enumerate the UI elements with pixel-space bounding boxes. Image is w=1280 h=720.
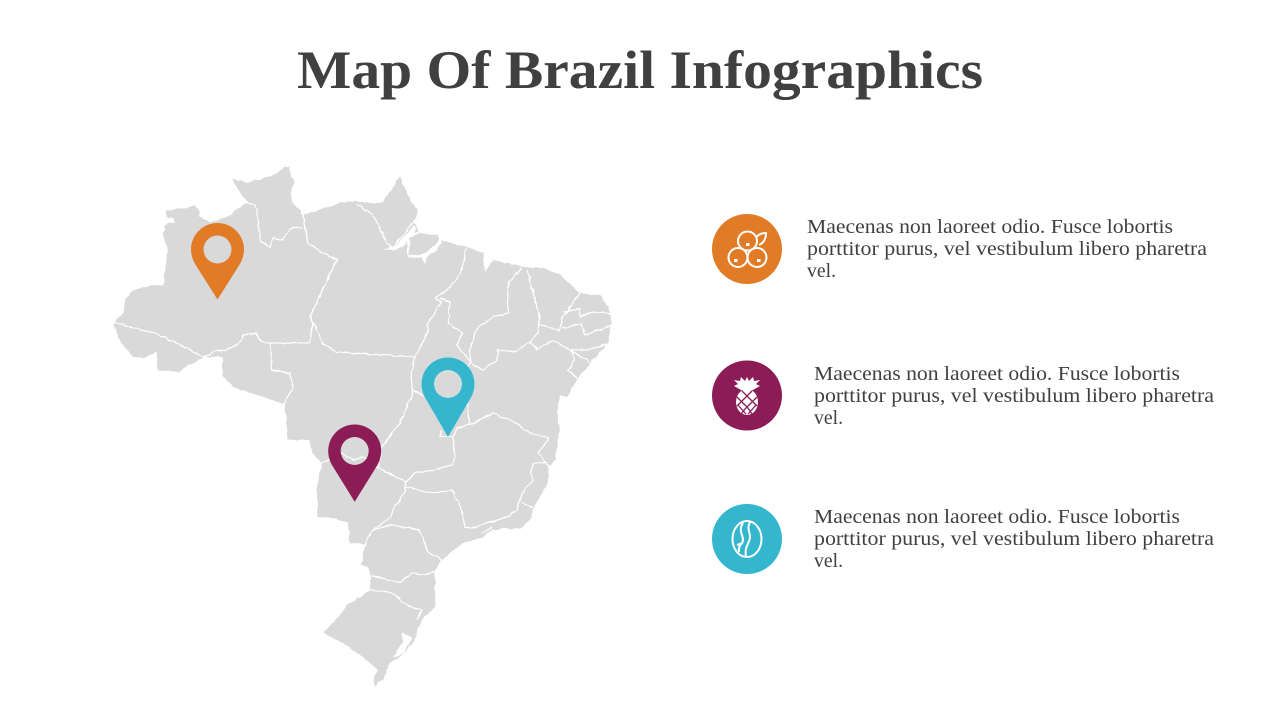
item 3: text: porttitor purus, vel vestibulum libero pharetra bbox=[814, 528, 1214, 550]
pin: purple bbox=[328, 424, 381, 502]
item 2: text: Maecenas non laoreet odio. Fusce lobortis bbox=[814, 363, 1180, 385]
item 3: teal icon bbox=[712, 504, 782, 574]
item 2: text bbox=[814, 363, 1214, 429]
item 2: text: vel. bbox=[814, 407, 843, 429]
item 3: text: vel. bbox=[814, 550, 843, 572]
item 2: text: porttitor purus, vel vestibulum libero pharetra bbox=[814, 385, 1214, 407]
item 2: purple icon bbox=[712, 360, 782, 430]
pin: orange bbox=[191, 223, 244, 300]
icon: coffee bean bbox=[732, 521, 762, 557]
item 1: orange icon bbox=[712, 214, 782, 284]
title: Map Of Brazil Infographics bbox=[297, 40, 983, 100]
item 3: text: Maecenas non laoreet odio. Fusce lobortis bbox=[814, 506, 1180, 528]
icon: berries bbox=[728, 232, 766, 267]
item 1: text: vel. bbox=[807, 260, 836, 282]
pin: teal bbox=[422, 358, 474, 437]
map of Brazil bbox=[113, 166, 612, 686]
item 1: text bbox=[807, 216, 1207, 282]
item 1: text: Maecenas non laoreet odio. Fusce lobortis bbox=[807, 216, 1173, 238]
item 3: text bbox=[814, 506, 1214, 572]
item 1: text: porttitor purus, vel vestibulum libero pharetra bbox=[807, 238, 1207, 260]
icon: pineapple bbox=[734, 377, 760, 415]
